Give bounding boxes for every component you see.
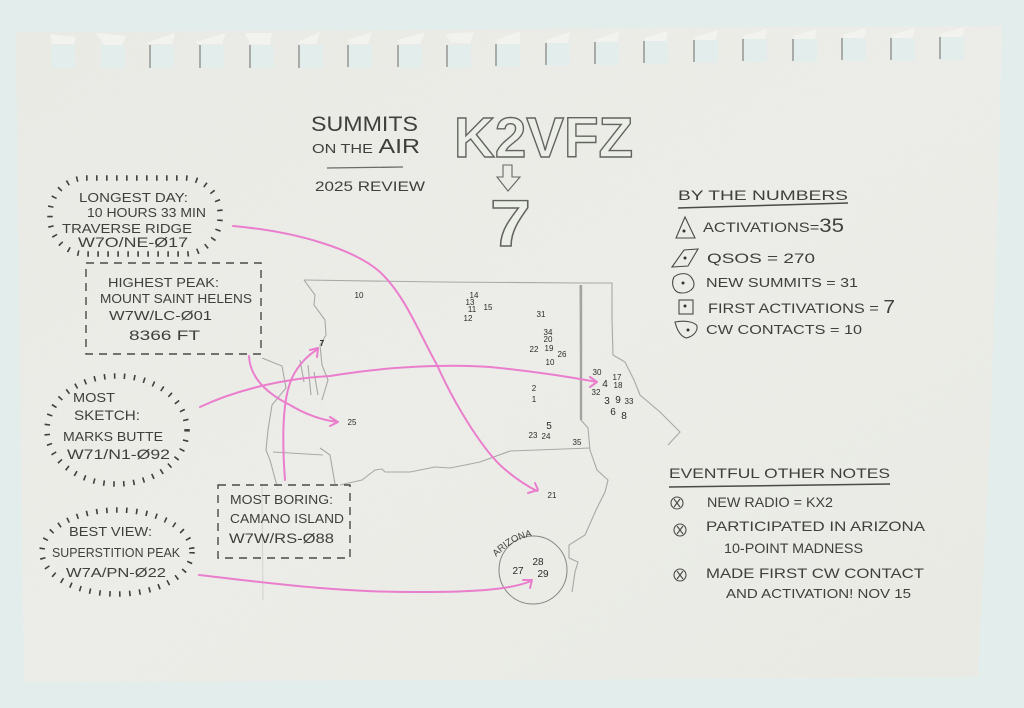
map: summit numbers: 20: [544, 335, 553, 344]
callout: best view: W7A/PN-Ø22: [66, 565, 166, 580]
panel: eventful other notes: 10-POINT MADNESS: [724, 540, 863, 556]
panel: by the numbers: FIRST ACTIVATIONS = 7: [708, 297, 895, 317]
callout: best view: BEST VIEW:: [69, 524, 152, 539]
map: summit numbers: 32: [592, 388, 601, 397]
callout: longest day: LONGEST DAY:: [79, 190, 188, 205]
map: summit numbers: 22: [530, 345, 539, 354]
title: Summits on the Air: ON THE AIR: [312, 136, 420, 158]
callout: most boring: CAMANO ISLAND: [230, 511, 344, 526]
callout: best view: SUPERSTITION PEAK: [52, 545, 180, 560]
callout: most sketch: MOST: [73, 390, 115, 405]
panel: eventful other notes: [669, 465, 926, 601]
callout: highest peak: HIGHEST PEAK:: [108, 275, 219, 290]
panel: eventful other notes: NEW RADIO = KX2: [707, 494, 833, 510]
title: Summits on the Air: 2025 REVIEW: [315, 178, 426, 194]
callout: highest peak: 8366 FT: [129, 327, 201, 343]
map: summit numbers: 31: [537, 310, 546, 319]
map: Arizona inset: ARIZONA: [494, 530, 532, 557]
panel: by the numbers: QSOS = 270: [707, 250, 815, 266]
panel: eventful other notes: EVENTFUL OTHER NOTES: [669, 465, 890, 481]
callout: longest day: W7O/NE-Ø17: [78, 234, 188, 250]
map: summit numbers: 11: [468, 305, 477, 314]
map: summit numbers: 13: [466, 298, 475, 307]
map: summit numbers: 8: [621, 411, 627, 422]
map: summit numbers: 24: [542, 432, 551, 441]
map: summit numbers: 18: [614, 381, 623, 390]
title: callsign K2VFZ to 7: 7: [490, 186, 531, 260]
callout: longest day: TRAVERSE RIDGE: [62, 221, 192, 236]
callout: most sketch: SKETCH:: [74, 407, 140, 423]
map: summit numbers: 28: [532, 557, 544, 568]
map: summit numbers: 27: [512, 566, 524, 577]
map: summit numbers: 25: [348, 418, 357, 427]
map: summit numbers: 10: [355, 291, 364, 300]
icon: blob: [673, 274, 694, 293]
map: summit numbers: 14: [470, 291, 479, 300]
callout: highest peak: W7W/LC-Ø01: [109, 308, 212, 323]
map: summit numbers: 4: [602, 379, 608, 390]
callout: most sketch: MARKS BUTTE: [63, 429, 163, 444]
map: summit numbers: 5: [546, 421, 552, 432]
icon: shield: [675, 321, 697, 338]
map: summit numbers: 6: [610, 407, 616, 418]
callout: best view: [42, 510, 192, 594]
icon: square: [679, 300, 693, 314]
map: summit numbers: 2: [532, 384, 537, 393]
panel: by the numbers: BY THE NUMBERS: [678, 187, 848, 203]
callout: highest peak: [86, 263, 261, 354]
map: summit numbers: 1: [532, 395, 537, 404]
map: summit numbers: 35: [573, 438, 582, 447]
icon: parallelogram: [672, 249, 698, 267]
map: Arizona inset: [494, 530, 568, 604]
icon: x bullet two: [674, 524, 686, 536]
panel: by the numbers: CW CONTACTS = 10: [706, 322, 862, 337]
map: summit numbers: 10: [546, 358, 555, 367]
title: Summits on the Air: SUMMITS: [311, 113, 418, 136]
map: summit numbers: 29: [537, 569, 549, 580]
callout: longest day: 10 HOURS 33 MIN: [87, 205, 206, 220]
icon: triangle: [676, 217, 695, 238]
panel: eventful other notes: MADE FIRST CW CONTACT: [706, 565, 925, 581]
map: summit numbers: 34: [544, 328, 553, 337]
map: summit numbers: [320, 291, 634, 580]
callout: most boring: W7W/RS-Ø88: [229, 530, 334, 546]
panel: by the numbers: [672, 187, 895, 338]
map: summit numbers: 21: [548, 491, 557, 500]
callout: most sketch: [47, 376, 187, 484]
panel: eventful other notes: AND ACTIVATION! NOV 15: [726, 586, 911, 601]
map: summit numbers: 9: [615, 395, 621, 406]
callout: longest day: [50, 178, 220, 254]
map: summit numbers: 3: [604, 396, 610, 407]
icon: x bullet three: [674, 569, 686, 581]
panel: by the numbers: NEW SUMMITS = 31: [706, 275, 858, 290]
title: Summits on the Air: [311, 113, 426, 194]
map: summit numbers: 7: [320, 339, 325, 348]
callout: most sketch: W71/N1-Ø92: [67, 446, 170, 462]
title: callsign K2VFZ to 7: [454, 106, 633, 260]
title: callsign K2VFZ to 7: K2VFZ: [454, 106, 633, 170]
map: summit numbers: 17: [613, 373, 622, 382]
map: summit numbers: 23: [529, 431, 538, 440]
map: summit numbers: 33: [625, 397, 634, 406]
map: summit numbers: 19: [545, 344, 554, 353]
spiral binding holes: [50, 27, 964, 68]
panel: by the numbers: ACTIVATIONS= 35: [703, 216, 844, 237]
map: summit numbers: 26: [558, 350, 567, 359]
map: Washington, Idaho, Oregon outline: [262, 280, 681, 604]
pink arrows linking callouts to map numbers: [199, 226, 597, 592]
map: summit numbers: 15: [484, 303, 493, 312]
callout: most boring: MOST BORING:: [230, 492, 333, 507]
icon: x bullet one: [671, 497, 683, 509]
callout: most boring: [218, 485, 350, 558]
panel: eventful other notes: PARTICIPATED IN ARIZONA: [706, 518, 926, 534]
map: summit numbers: 12: [464, 314, 473, 323]
callout: highest peak: MOUNT SAINT HELENS: [100, 291, 252, 306]
map: summit numbers: 30: [593, 368, 602, 377]
